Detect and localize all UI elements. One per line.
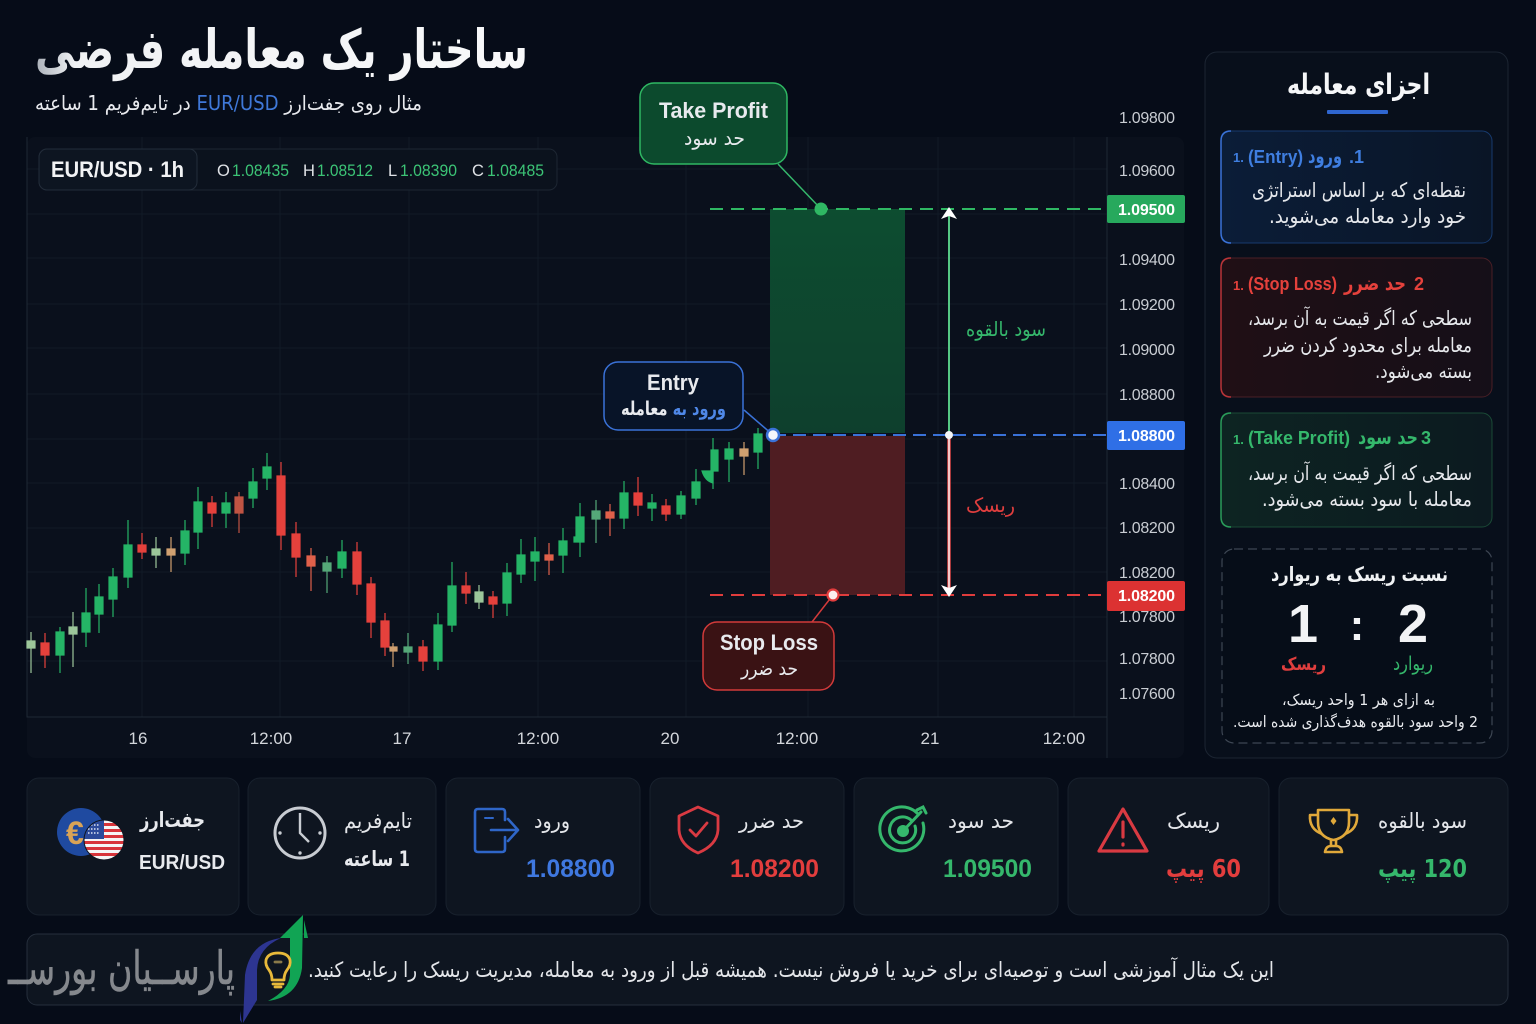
callout: take profit: حد سود xyxy=(684,126,745,150)
price tag: take profit xyxy=(1107,195,1185,223)
risk reward ratio box: 2 واحد سود بالقوه هدف‌گذاری شده است. xyxy=(1233,713,1478,732)
icon: trophy xyxy=(1310,810,1357,852)
price axis: 1.09200 xyxy=(1119,297,1175,314)
card: take profit: حد سود xyxy=(1358,425,1418,449)
icon: warning triangle xyxy=(1099,809,1147,851)
OHLC bar: O xyxy=(217,162,230,180)
card: stop loss: بسته می‌شود. xyxy=(1375,359,1472,383)
arrow: risk xyxy=(941,431,957,597)
stat: entry xyxy=(446,778,640,915)
price tag: entry: 1.08800 xyxy=(1118,428,1175,445)
card: entry: ورود xyxy=(1308,144,1342,168)
risk zone xyxy=(770,436,905,595)
stat: potential profit xyxy=(1279,778,1508,915)
disclaimer note: این یک مثال آموزشی است و توصیه‌ای برای خرید یا فروش نیست. همیشه قبل از ورود به معامله، مدیریت ریسک را رعایت کنید. xyxy=(308,957,1274,982)
time axis: 12:00 xyxy=(776,729,818,748)
time axis: 12:00 xyxy=(517,729,559,748)
card: entry xyxy=(1221,131,1492,243)
stat: take profit: 1.09500 xyxy=(943,855,1032,883)
time axis: 21 xyxy=(921,729,939,748)
price axis xyxy=(1119,110,1175,703)
OHLC bar: 1.08390 xyxy=(400,162,457,180)
panel: chart xyxy=(27,83,1185,758)
OHLC bar: EUR/USD · 1h xyxy=(51,157,184,182)
callout: entry: ورود به معامله xyxy=(621,398,726,420)
stat: risk: 60 پیپ xyxy=(1166,854,1241,883)
stat: stop loss xyxy=(650,778,844,915)
stat: currency pair: EUR/USD xyxy=(139,852,225,874)
panel: trade components xyxy=(1205,52,1508,758)
stat: risk: ریسک xyxy=(1167,809,1220,833)
callout: stop loss: Stop Loss xyxy=(720,630,818,655)
callout: take profit xyxy=(640,83,828,216)
card: take profit: 3 xyxy=(1421,428,1431,448)
card: entry: خود وارد معامله می‌شوید. xyxy=(1269,204,1466,228)
callout: entry xyxy=(604,362,779,441)
callout: take profit: Take Profit xyxy=(659,98,769,123)
risk reward ratio box: 1 xyxy=(1288,594,1318,654)
card: stop loss: 2 xyxy=(1414,274,1424,294)
stat: stop loss: حد ضرر xyxy=(738,809,804,833)
profit zone xyxy=(770,209,905,433)
price tag: entry xyxy=(1107,421,1185,450)
title: ساختار یک معامله فرضی xyxy=(35,18,528,81)
card: take profit: (Take Profit) xyxy=(1248,428,1350,448)
label: risk: ریسک xyxy=(966,493,1015,517)
time axis: 17 xyxy=(393,729,411,748)
stat: take profit xyxy=(854,778,1058,915)
heading: اجزای معامله xyxy=(1287,68,1430,101)
icon: lightbulb xyxy=(266,953,290,987)
risk reward ratio box: ریوارد xyxy=(1393,653,1433,675)
risk reward ratio box: ریسک xyxy=(1281,654,1326,675)
time axis xyxy=(129,729,1085,748)
risk reward ratio box: نسبت ریسک به ریوارد xyxy=(1271,562,1448,586)
stat: timeframe xyxy=(248,778,436,915)
icon: entry door xyxy=(475,809,518,852)
label: potential profit: سود بالقوه xyxy=(966,317,1046,341)
stat: timeframe: تایم‌فریم xyxy=(344,809,412,834)
price axis: 1.07800 xyxy=(1119,609,1175,626)
disclaimer note xyxy=(27,934,1508,1005)
stop loss line xyxy=(710,594,1107,596)
card: take profit: 1. xyxy=(1233,432,1244,447)
price tag: stop loss xyxy=(1107,581,1185,611)
stat: potential profit: 120 پیپ xyxy=(1378,854,1467,883)
take profit line xyxy=(710,208,1107,210)
icon: clock xyxy=(275,808,325,858)
OHLC bar: H xyxy=(303,162,315,180)
price tag: take profit: 1.09500 xyxy=(1118,202,1175,219)
stat: potential profit: سود بالقوه xyxy=(1378,809,1467,833)
heading underline xyxy=(1327,110,1388,114)
price axis: 1.08200 xyxy=(1119,520,1175,537)
risk reward ratio box: به ازای هر 1 واحد ریسک، xyxy=(1282,691,1435,710)
risk reward ratio box xyxy=(1222,549,1492,743)
subtitle: مثال روی جفت‌ارز EUR/USD در تایم‌فریم 1 ساعته xyxy=(35,91,422,115)
callout: stop loss: حد ضرر xyxy=(740,658,798,680)
OHLC bar: C xyxy=(472,162,484,180)
time axis: 20 xyxy=(661,729,679,748)
time axis: 12:00 xyxy=(1043,729,1085,748)
price axis: 1.08400 xyxy=(1119,476,1175,493)
OHLC bar: 1.08512 xyxy=(317,162,373,180)
watermark logo text: پارســیان بورســ xyxy=(7,941,235,996)
card: entry: نقطه‌ای که بر اساس استراتژی xyxy=(1252,178,1466,202)
price axis: 1.09000 xyxy=(1119,342,1175,359)
card: stop loss: سطحی که اگر قیمت به آن برسد، xyxy=(1248,305,1472,330)
callout: entry: Entry xyxy=(647,370,700,395)
OHLC bar xyxy=(39,149,557,190)
card: entry: 1. xyxy=(1233,150,1244,165)
card: take profit: معامله با سود بسته می‌شود. xyxy=(1262,487,1472,511)
card: stop loss: 1. xyxy=(1233,278,1244,293)
stat: risk xyxy=(1068,778,1269,915)
arrow: potential profit xyxy=(941,207,957,435)
entry line xyxy=(773,434,1107,436)
card: take profit: سطحی که اگر قیمت به آن برسد، xyxy=(1248,460,1472,485)
price axis: 1.09600 xyxy=(1119,163,1175,180)
stat: stop loss: 1.08200 xyxy=(730,855,819,883)
card: stop loss: (Stop Loss) xyxy=(1248,274,1337,294)
price axis: 1.07800 xyxy=(1119,651,1175,668)
card: stop loss xyxy=(1221,258,1492,397)
icon: euro and US flag: € xyxy=(66,815,84,851)
stat: currency pair: جفت‌ارز xyxy=(139,808,205,832)
card: stop loss: معامله برای محدود کردن ضرر xyxy=(1263,333,1472,357)
price axis: 1.09800 xyxy=(1119,110,1175,127)
icon: shield xyxy=(679,807,718,853)
OHLC bar: 1.08435 xyxy=(232,162,289,180)
price axis: 1.07600 xyxy=(1119,686,1175,703)
stat: currency pair xyxy=(27,778,239,915)
price axis: 1.08200 xyxy=(1119,565,1175,582)
stat: take profit: حد سود xyxy=(948,809,1014,833)
candlestick chart xyxy=(27,428,762,673)
time axis: 12:00 xyxy=(250,729,292,748)
risk reward ratio box: 2 xyxy=(1398,594,1428,654)
card: entry: (Entry) xyxy=(1248,147,1303,167)
logo mark xyxy=(240,915,308,1023)
stat: entry: 1.08800 xyxy=(526,855,615,883)
OHLC bar: 1.08485 xyxy=(487,162,544,180)
callout: stop loss xyxy=(703,590,838,690)
card: entry: .1 xyxy=(1349,147,1364,167)
stat: entry: ورود xyxy=(534,809,570,833)
stat: timeframe: 1 ساعته xyxy=(344,847,410,871)
icon: target xyxy=(880,807,926,851)
price axis: 1.08800 xyxy=(1119,387,1175,404)
price axis: 1.09400 xyxy=(1119,252,1175,269)
time axis: 16 xyxy=(129,729,147,748)
risk reward ratio box: : xyxy=(1350,601,1364,650)
icon: euro and US flag xyxy=(57,808,124,860)
OHLC bar: L xyxy=(388,162,397,180)
card: take profit xyxy=(1221,413,1492,527)
price tag: stop loss: 1.08200 xyxy=(1118,588,1175,605)
card: stop loss: حد ضرر xyxy=(1343,271,1406,295)
